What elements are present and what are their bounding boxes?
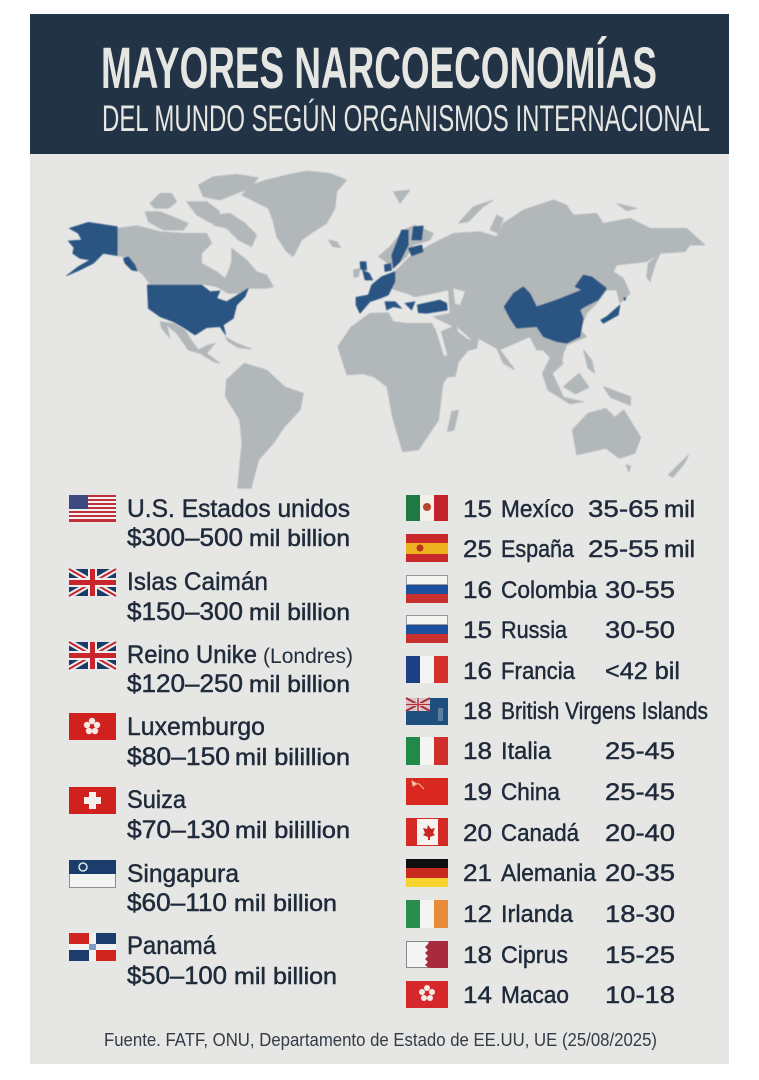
row: Colombia: Colombia: [501, 577, 598, 604]
row: China: 25-45: [605, 779, 675, 806]
background panel: [30, 154, 729, 1064]
southern continents: [226, 320, 688, 488]
row: Irlanda: [406, 900, 675, 928]
row: Luxemburgo: Luxemburgo: [127, 713, 265, 741]
row: Colombia: [406, 576, 675, 604]
row: Irlanda: Irlanda: [501, 901, 574, 928]
row: Singapura: Singapura: [127, 860, 239, 888]
row: Irlanda: 12: [463, 901, 492, 928]
row: Ciprus: 18: [463, 942, 492, 969]
row: Canadá: Canadá: [501, 820, 580, 847]
row: Alemania: Alemania: [501, 860, 597, 887]
row: España: 25-55: [588, 536, 659, 563]
row: Alemania: 20-35: [605, 860, 675, 887]
row: Panamá: mil billion: [234, 963, 337, 989]
row: México: 35-65: [588, 496, 659, 523]
row: Estados Unidos: mil billion: [249, 525, 350, 551]
header banner: [30, 14, 729, 154]
row: Russia: Russia: [501, 617, 568, 644]
flag: Canada: [406, 818, 448, 846]
row: Luxemburgo: mil bilillion: [235, 744, 350, 770]
row: Singapura: $60–110: [127, 889, 227, 917]
flag: Spain: [406, 534, 448, 562]
row: Canadá: 20: [463, 820, 492, 847]
right ranking list: [406, 495, 708, 1009]
row: Suiza: Suiza: [127, 786, 186, 814]
row: México: Mexíco: [501, 496, 574, 523]
north america: [67, 171, 347, 363]
row: Italia: Italia: [501, 738, 552, 765]
row: España: mil: [664, 536, 695, 562]
row: Reino Unido: mil billion: [249, 671, 350, 697]
row: British Virgin Islands: British Virgens Islands: [501, 698, 708, 725]
row: España: España: [501, 536, 575, 563]
row: Estados Unidos: [69, 495, 350, 552]
flag: red with flower: [406, 981, 448, 1008]
inland seas: [435, 288, 472, 356]
row: Panamá: [69, 932, 337, 990]
row: México: [406, 495, 695, 523]
row: Colombia: 16: [463, 577, 492, 604]
row: Francia: Francia: [501, 658, 576, 685]
row: Reino Unido: (Londres): [263, 645, 353, 668]
row: Ciprus: 15-25: [605, 942, 675, 969]
row: Panamá: $50–100: [127, 962, 227, 990]
row: China: [406, 778, 675, 806]
row: Reino Unido: [69, 641, 353, 698]
row: Macao: [406, 981, 675, 1009]
row: Estados Unidos: U.S. Estados unidos: [127, 495, 350, 523]
row: Singapura: [69, 860, 337, 917]
flag: USA: [69, 495, 116, 522]
row: Luxemburgo: [69, 713, 350, 771]
row: Macao: Macao: [501, 982, 569, 1009]
row: Russia: [406, 616, 675, 644]
row: Irlanda: 18-30: [605, 901, 675, 928]
flag: red with flower: [69, 713, 116, 740]
world map: [67, 171, 705, 488]
row: Francia: 16: [463, 658, 492, 685]
row: Estados Unidos: $300–500: [127, 524, 243, 552]
row: Colombia: 30-55: [605, 577, 675, 604]
flag: Germany: [406, 859, 448, 887]
highlighted countries in europe and asia: [356, 226, 626, 343]
flag: Switzerland: [69, 787, 116, 814]
row: Luxemburgo: $80–150: [127, 743, 230, 771]
flag: maroon and white: [406, 941, 448, 968]
row: Italia: 25-45: [605, 738, 675, 765]
row: Canadá: [406, 818, 675, 847]
row: España: 25: [463, 536, 492, 563]
row: Macao: 10-18: [605, 982, 675, 1009]
flag: blue and white: [69, 860, 116, 888]
row: México: mil: [664, 496, 695, 522]
row: México: 15: [463, 496, 492, 523]
row: Suiza: [69, 786, 350, 844]
eurasia: [340, 190, 705, 377]
flag: Mexico: [406, 495, 448, 521]
row: British Virgin Islands: 18: [463, 698, 492, 725]
row: Islas Caimán: mil billion: [249, 599, 350, 625]
row: Panamá: Panamá: [127, 932, 216, 960]
left ranking list: [69, 495, 353, 990]
row: British Virgin Islands: [406, 698, 708, 725]
flag: UK: [69, 642, 116, 669]
row: Alemania: [406, 859, 675, 887]
flag: BVI: [406, 698, 448, 725]
row: Islas Caimán: $150–300: [127, 598, 243, 626]
row: Russia: 15: [463, 617, 492, 644]
row: Suiza: mil bilillion: [235, 817, 350, 843]
row: Ciprus: [406, 941, 675, 969]
row: Francia: <42 bil: [605, 658, 680, 685]
row: Islas Caimán: Islas Caimán: [127, 568, 268, 596]
row: Reino Unido: $120–250: [127, 670, 243, 698]
row: Ciprus: Ciprus: [501, 942, 568, 969]
row: Suiza: $70–130: [127, 816, 230, 844]
flag: white blue red: [406, 576, 448, 603]
row: Italia: [406, 737, 675, 765]
flag: China: [406, 778, 448, 805]
row: China: 19: [463, 779, 492, 806]
row: Islas Caimán: [69, 568, 350, 626]
row: Macao: 14: [463, 982, 492, 1009]
row: Canadá: 20-40: [605, 820, 675, 847]
flag: Ireland: [406, 900, 448, 928]
row: China: China: [501, 779, 561, 806]
row: Reino Unido: Reino Unike: [127, 641, 257, 669]
flag: France: [406, 656, 448, 683]
row: Singapura: mil billion: [234, 890, 337, 916]
row: Russia: 30-50: [605, 617, 675, 644]
row: España: [406, 534, 695, 563]
row: Francia: [406, 656, 680, 685]
row: Italia: 18: [463, 738, 492, 765]
row: Alemania: 21: [463, 860, 492, 887]
flag: Russia: [406, 616, 448, 643]
flag: Italy: [406, 737, 448, 765]
source footnote: Fuente. FATF, ONU, Departamento de Estado de EE.UU, UE (25/08/2025): [104, 1029, 657, 1050]
flag: quartered: [69, 933, 116, 961]
flag: UK: [69, 569, 116, 596]
